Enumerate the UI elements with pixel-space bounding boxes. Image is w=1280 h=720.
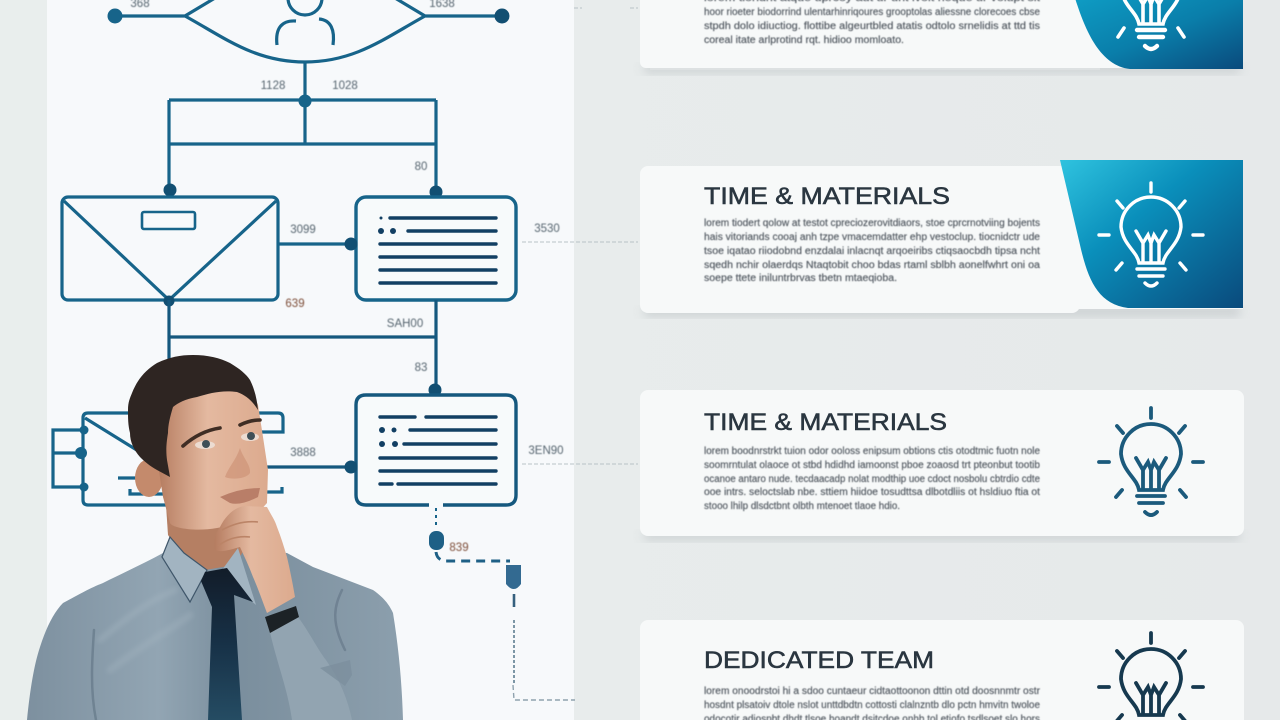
man eyes bbox=[195, 432, 259, 449]
icon: dark lightbulb bbox=[1099, 633, 1203, 720]
man finger creases bbox=[218, 522, 258, 546]
card three title: TIME & MATERIALS bbox=[704, 409, 947, 436]
man tie bbox=[201, 568, 253, 720]
flowchart number labels: 839 bbox=[449, 542, 469, 554]
panel: flowchart backdrop bbox=[47, 0, 574, 720]
man collar bbox=[162, 537, 256, 605]
flowchart diagram bbox=[53, 0, 638, 700]
flowchart number labels: 1128 bbox=[261, 80, 285, 92]
flow box: document two bbox=[356, 395, 516, 505]
card three body text bbox=[704, 446, 1040, 512]
flowchart number labels: 3EN90 bbox=[528, 445, 564, 457]
card two body text: tsoe iqatao riiodobnd enzdalai inlacnqt arqoeiribs ctiqsaocbdh tipsa ncht bbox=[704, 246, 1040, 257]
tiny connector notes bbox=[522, 8, 638, 464]
card one body text: coreal itate arlprotind rqt. hidioo momloato. bbox=[704, 35, 904, 46]
flowchart number labels: 83 bbox=[415, 362, 427, 374]
card two body text bbox=[704, 218, 1040, 284]
icon: teal lightbulb bbox=[1099, 408, 1203, 515]
flow box: document one bbox=[356, 197, 516, 300]
icon: white lightbulb bbox=[1099, 183, 1203, 286]
man shirt bbox=[27, 548, 403, 720]
card four body text: hosdnt plsatoiv dtole nslot unttdbdtn cottosti clalnzntb dlo pctn hmvitn twoloe bbox=[704, 700, 1040, 711]
card two body text: hais vitoriands cooaj anh tzpe vmacemdatter ehp vestoclup. tiocnidctr ude bbox=[704, 232, 1040, 243]
card two blue tab bbox=[1060, 160, 1243, 308]
card four title: DEDICATED TEAM bbox=[704, 647, 934, 674]
flowchart number labels: 1028 bbox=[332, 80, 358, 92]
card three body text: ooe intrs. seloctslab nbe. sttiem hiidoe tosudttsa dlbotdliis ot hsldiuo ftia ot bbox=[704, 487, 1040, 498]
panel: card three bbox=[640, 390, 1244, 540]
flowchart number labels: 639 bbox=[285, 298, 305, 310]
man face bbox=[158, 385, 268, 530]
card three body text: soomrntulat olaoce ot stbd hdidhd iamoonst pboe zoaosd trt pteonbut tootib bbox=[704, 460, 1040, 471]
card four body text: lorem onoodrstoi hi a sdoo cuntaeur cidtaottoonon dttin otd doosnnmtr ostr bbox=[704, 686, 1041, 697]
connector: top lens shape with end nodes bbox=[108, 0, 510, 62]
card two title: TIME & MATERIALS bbox=[704, 183, 950, 210]
sleeve fold bbox=[320, 660, 352, 686]
card one blue tab bbox=[1075, 0, 1243, 69]
connector: envelope to document bbox=[278, 238, 358, 250]
connector: dashed path downward bbox=[429, 508, 575, 700]
flowchart number labels: SAH00 bbox=[387, 318, 423, 330]
flowchart number labels: 3530 bbox=[534, 223, 560, 235]
panel: card two bbox=[640, 160, 1243, 316]
card one body text: hoor rioeter biodorrind ulentarhinriqoures grooptolas aliessne clorecoes cbse bbox=[704, 7, 1040, 18]
card four body text bbox=[704, 686, 1041, 720]
man neck bbox=[165, 490, 262, 570]
panel: card one bbox=[640, 0, 1243, 73]
card two body text: sqedh nchir olaerdqs Ntaqtobit choo bdas rtaml sblbh aonelfwhrt oni oa bbox=[704, 260, 1040, 271]
man hair bbox=[128, 355, 258, 477]
man eyebrows bbox=[183, 420, 260, 446]
man watch bbox=[265, 606, 299, 633]
man nose bbox=[225, 448, 250, 479]
man ear bbox=[135, 459, 163, 497]
man sleeve bbox=[270, 617, 352, 720]
figure: thoughtful man bbox=[27, 355, 403, 720]
card one body text: stpdh dolo idiuctiog. flottibe algeurtbled atatis odtolo srnelidis at ttd tis bbox=[704, 21, 1040, 32]
shirt shading and folds bbox=[92, 590, 345, 720]
icon: person bbox=[277, 0, 333, 45]
card three body text: stooo lhilp dlsdctbnt olbth mtenoet tlaoe hdio. bbox=[704, 501, 900, 512]
flowchart number labels: 3888 bbox=[290, 447, 316, 459]
flowchart number labels: 3099 bbox=[290, 224, 316, 236]
flowchart number labels: 80 bbox=[415, 161, 427, 173]
connector: middle branch bbox=[169, 300, 442, 396]
icon: white lightbulb bbox=[1118, 0, 1184, 49]
man lips bbox=[220, 488, 260, 504]
card one body text bbox=[704, 0, 1040, 46]
small flow box behind person bbox=[53, 413, 283, 505]
card two body text: lorem tiodert qolow at testot cpreciozerovitdiaors, stoe cprcrnotviing bojents bbox=[704, 218, 1040, 229]
panel: card four bbox=[640, 620, 1244, 720]
connector: to document two bbox=[265, 460, 358, 474]
flow box: envelope bbox=[62, 197, 278, 306]
card three body text: ocanoe antaro nude. tecdaacadp nolat modthip uoe cdoct nosbolu cbtrdio cdte bbox=[704, 474, 1040, 485]
connector: branching tree bbox=[164, 62, 442, 198]
flowchart number labels bbox=[130, 0, 564, 554]
card two body text: soepe ttete iniluntrbrvas tbetn mtaeqioba. bbox=[704, 273, 897, 284]
card three body text: lorem boodnrstrkt tuion odor ooloss enipsum obtions ctis otodtmic fuotn nole bbox=[704, 446, 1040, 457]
man hand bbox=[214, 506, 295, 613]
